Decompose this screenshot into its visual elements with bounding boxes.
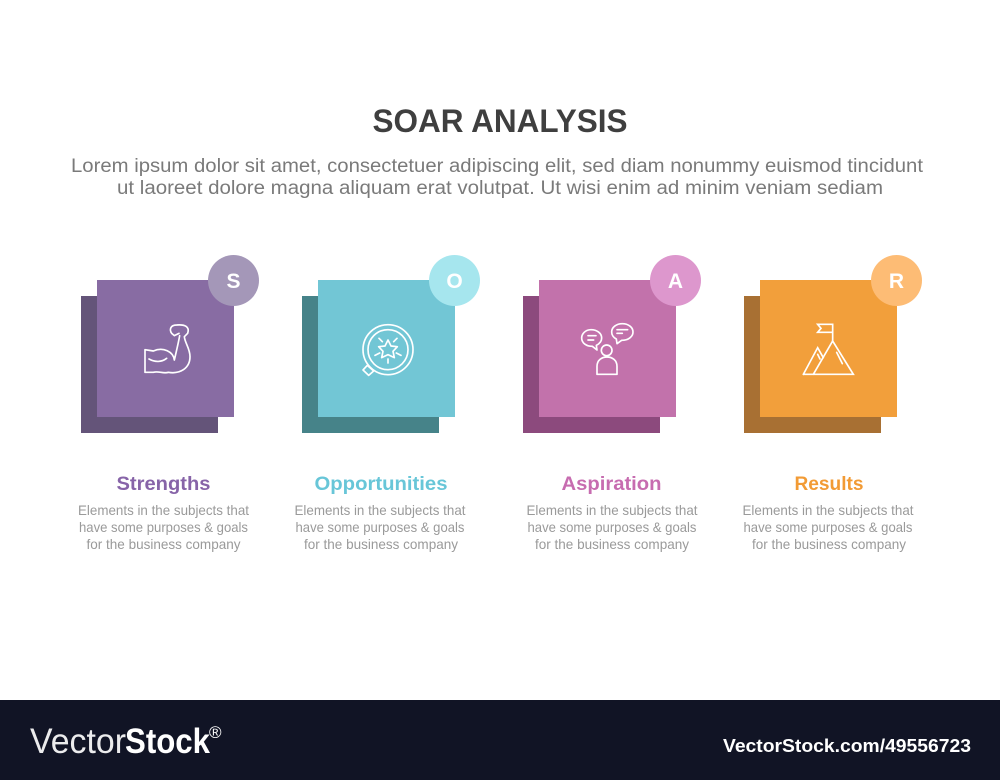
card shadow: aspiration bbox=[523, 296, 660, 433]
heading: strengths: Strengths bbox=[116, 474, 210, 495]
panel: results card bbox=[744, 255, 922, 433]
card shadow: results bbox=[744, 296, 881, 433]
icon: mountain with flag bbox=[803, 324, 853, 374]
badge: A bbox=[650, 255, 701, 306]
footer logo: Stock bbox=[125, 722, 210, 761]
intro text block: ut laoreet dolore magna aliquam erat volutpat. Ut wisi enim ad minim veniam sediam bbox=[117, 178, 883, 199]
description: opportunities: Elements in the subjects that bbox=[294, 502, 466, 518]
card face: results bbox=[760, 280, 897, 417]
description: strengths: have some purposes & goals bbox=[79, 519, 248, 535]
icon: star medal bbox=[363, 325, 413, 375]
description: aspiration: for the business company bbox=[535, 536, 689, 552]
card face: aspiration bbox=[539, 280, 676, 417]
panel: aspiration card bbox=[523, 255, 701, 433]
icon: flexed arm bbox=[145, 325, 190, 373]
badge: S: S bbox=[226, 270, 241, 293]
aspiration text block bbox=[526, 474, 698, 552]
badge: A: A bbox=[668, 270, 683, 293]
description: aspiration: Elements in the subjects that bbox=[526, 502, 698, 518]
footer image id: VectorStock.com/49556723 bbox=[723, 736, 971, 756]
intro text block bbox=[71, 156, 924, 199]
panel: opportunities card bbox=[302, 255, 480, 433]
footer bar bbox=[0, 700, 1000, 780]
badge: O: O bbox=[446, 270, 463, 293]
description: results bbox=[742, 502, 914, 552]
opportunities text block bbox=[294, 474, 466, 552]
card face: strengths bbox=[97, 280, 234, 417]
description: aspiration bbox=[526, 502, 698, 552]
badge: R bbox=[871, 255, 922, 306]
badge: S bbox=[208, 255, 259, 306]
icon: person with speech bubbles bbox=[582, 324, 633, 374]
card shadow: strengths bbox=[81, 296, 218, 433]
strengths text block bbox=[78, 474, 249, 552]
footer logo: ® bbox=[209, 723, 222, 742]
panel: strengths card bbox=[81, 255, 259, 433]
description: results: for the business company bbox=[752, 536, 906, 552]
description: strengths bbox=[78, 502, 249, 552]
description: opportunities: have some purposes & goals bbox=[296, 519, 464, 535]
heading: results: Results bbox=[794, 474, 864, 495]
card face: opportunities bbox=[318, 280, 455, 417]
description: strengths: for the business company bbox=[86, 536, 240, 552]
description: opportunities: for the business company bbox=[304, 536, 458, 552]
badge: R: R bbox=[889, 270, 904, 293]
description: strengths: Elements in the subjects that bbox=[78, 502, 249, 518]
intro text block: Lorem ipsum dolor sit amet, consectetuer adipiscing elit, sed diam nonummy euismod tincidunt bbox=[71, 156, 924, 177]
results text block bbox=[742, 474, 914, 552]
footer logo bbox=[30, 722, 222, 761]
badge: O bbox=[429, 255, 480, 306]
description: opportunities bbox=[294, 502, 466, 552]
description: results: Elements in the subjects that bbox=[742, 502, 914, 518]
title: SOAR ANALYSIS bbox=[372, 103, 628, 139]
heading: aspiration: Aspiration bbox=[562, 474, 662, 495]
footer logo: Vector bbox=[30, 722, 126, 761]
card shadow: opportunities bbox=[302, 296, 439, 433]
description: results: have some purposes & goals bbox=[744, 519, 912, 535]
description: aspiration: have some purposes & goals bbox=[528, 519, 696, 535]
heading: opportunities: Opportunities bbox=[314, 474, 448, 495]
